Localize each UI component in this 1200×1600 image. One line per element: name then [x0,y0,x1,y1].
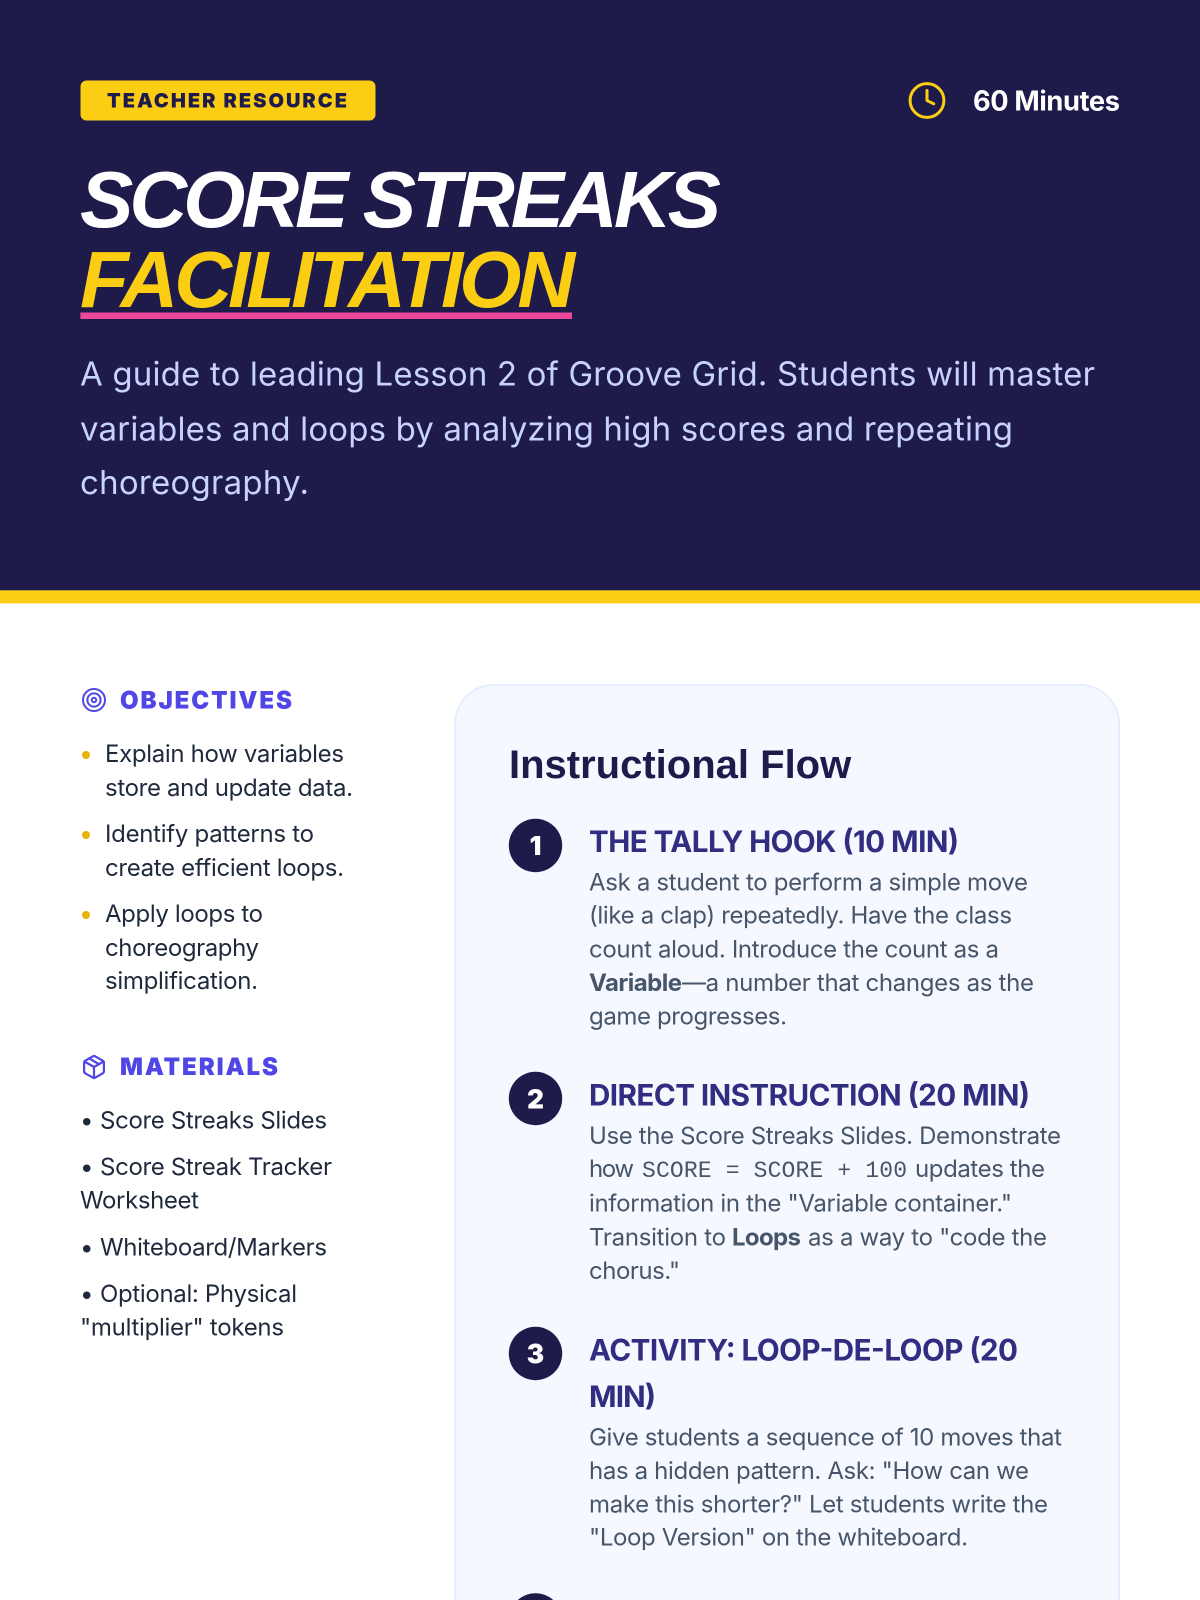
icon: clock [910,84,944,117]
step 3 title: MIN) [589,1379,656,1415]
materials list: Whiteboard/Markers [100,1232,327,1262]
step 2 number: 2 [527,1084,544,1116]
step 1 text: count aloud. Introduce the count as a [589,934,999,963]
objectives list: choreography [105,933,259,962]
objectives list: simplification. [105,966,258,995]
icon: target [83,689,105,711]
subtitle: A guide to leading Lesson 2 of Groove Grid. Students will master [80,354,1095,394]
step 3 text: make this shorter?" Let students write the [589,1490,1048,1518]
title: FACILITATION [80,235,577,324]
panel: materials [80,1052,332,1342]
step 2 title: DIRECT INSTRUCTION (20 MIN) [589,1077,1030,1113]
step 1 number [509,819,562,872]
materials list: • [80,1232,94,1262]
step 1 [509,819,1034,1030]
step 2 text: Transition to [589,1222,726,1251]
step 1 text: —a number that changes as the [682,968,1034,997]
objectives list: Apply loops to [105,899,263,928]
objectives list: Explain how variables [105,739,344,768]
panel: objectives [82,686,353,995]
materials list: Worksheet [80,1186,199,1214]
step 3 title [589,1332,1018,1415]
step 2 [509,1072,1061,1285]
step 3 title: ACTIVITY: LOOP-DE-LOOP (20 [589,1332,1018,1368]
step 1 title: THE TALLY HOOK (10 MIN) [589,824,959,860]
title: SCORE STREAKS [80,155,721,244]
step 2 text: chorus." [589,1256,680,1285]
materials list: • [80,1279,94,1308]
step 3 text [589,1422,1062,1552]
materials list: "multiplier" tokens [80,1312,284,1342]
step 3 text: Give students a sequence of 10 moves that [589,1422,1062,1452]
objectives list: Identify patterns to [105,819,314,848]
subtitle: choreography. [80,462,309,502]
step 1 text: game progresses. [589,1002,787,1030]
materials list: Optional: Physical [100,1279,297,1308]
objectives list [82,739,353,995]
step 2 text: SCORE = SCORE + 100 [642,1158,907,1184]
heading: instructional flow: Instructional Flow [509,743,852,787]
step 3 text: has a hidden pattern. Ask: "How can we [589,1456,1029,1485]
step 3 number: 3 [527,1339,544,1370]
materials list: • [80,1152,94,1181]
step 3 text: "Loop Version" on the whiteboard. [589,1522,968,1552]
badge: teacher resource [80,80,376,120]
step 1 number: 1 [530,831,541,862]
header panel [0,0,1200,603]
objectives list: create efficient loops. [105,853,344,882]
title [80,155,721,324]
panel: instructional flow [455,685,1119,1600]
step 2 text: updates the [915,1154,1045,1183]
heading: materials: MATERIALS [120,1052,278,1081]
step 3 number [509,1327,562,1380]
heading: objectives: OBJECTIVES [120,686,292,714]
step 2 number [509,1072,562,1125]
step 2 text: information in the "Variable container." [589,1188,1012,1218]
step 3 [509,1327,1062,1552]
materials list: • [80,1106,94,1134]
materials list: Score Streak Tracker [100,1152,332,1181]
step 2 text: Loops [732,1222,801,1251]
badge: teacher resource: TEACHER RESOURCE [107,88,347,112]
icon: package [84,1056,104,1078]
materials list: Score Streaks Slides [100,1106,327,1134]
step 2 text: how [589,1154,634,1183]
materials list [80,1106,332,1342]
step 1 text: Variable [589,968,682,997]
step 2 text [589,1121,1061,1285]
step 4 number [518,1593,553,1600]
objectives list: store and update data. [105,773,353,802]
step 1 text: (like a clap) repeatedly. Have the class [589,901,1012,930]
step 2 text: Use the Score Streaks Slides. Demonstrate [589,1121,1061,1150]
step 1 text: Ask a student to perform a simple move [589,868,1028,897]
step 2 text: as a way to "code the [808,1222,1047,1251]
subtitle [80,354,1095,502]
step 1 text [589,868,1034,1030]
duration label: 60 Minutes [973,85,1120,118]
subtitle: variables and loops by analyzing high scores and repeating [80,409,1013,449]
